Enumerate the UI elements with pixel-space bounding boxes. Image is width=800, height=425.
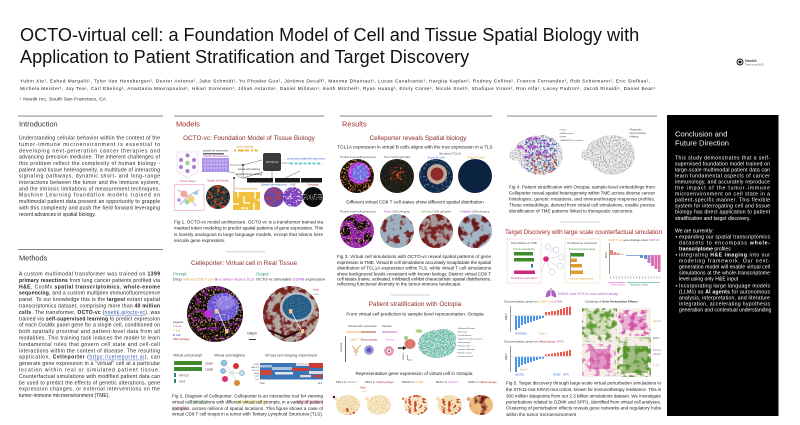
row 2 labels: Protein immunofluorescence — [340, 210, 376, 214]
bar chart: SPP1: NDUFB2 — [515, 374, 525, 376]
bar chart: GZMK: Gene X — [539, 334, 547, 336]
logo and QR note — [737, 59, 764, 66]
gene masking: neighborhood masking — [236, 172, 263, 176]
text block: methods — [19, 272, 160, 399]
octopia annotated scatter: • KRAS/STK11 co-mutant — [559, 139, 583, 142]
text block: methods: modalities. This training task induces the model to learn — [19, 336, 160, 342]
text block: current work bullets: datasets to encompass whole- — [679, 240, 770, 246]
text block: introduction: patient and tissue heterogeneity, a multitude of interacting — [19, 167, 160, 173]
scale bar — [247, 332, 257, 340]
author list: Michela Meister¹, Joy Tea¹, Carl Ebeling¹, Anastasia Mavropoulos¹, Hikari Sorensen¹, Jillian Astarita¹, Daniel Millman¹, Keith Mitchell¹, Ryan Huang¹, Emily Corse¹, Nicole Snell¹, Shafique Virani¹, Ron Alfa¹, Lacey Padron¹, Jacob Rinaldi¹, Daniel Bear¹ — [20, 86, 655, 92]
row 1 labels: Virtual B Cells — [427, 156, 445, 160]
text block: conclusion summary: patient-specific manner. This flexible — [675, 198, 770, 204]
gene changes waterfall: vCD8 T cell gene changes when SIRT1/4 — [608, 238, 660, 242]
gene masking — [233, 144, 263, 179]
panel: methods — [18, 249, 163, 399]
figure 4 caption: Fig 4. Patient stratification with Octopia: sample-level embeddings from — [509, 184, 655, 190]
text block: introduction: recent advances in spatial biology. — [19, 212, 96, 218]
logo and QR note: Noetik — [745, 59, 757, 63]
perturbation heatmap: T cell — [653, 364, 659, 367]
author list: Yubin Xie¹, Eshed Margalit¹, Tyler Van Hensbergen¹, Dexter Antonio¹, Jake Schmidt¹, Yu Phoebe Guo¹, Jérémie Decalf¹, Maxime Dhainaut¹, Lucas Cavalcante¹, Hargita Kaplan¹, Rodney Collins¹, Francis Fernandez¹, Rob Schiemann¹, Eric Siefkas¹, — [20, 79, 650, 85]
heading: methods: Methods — [19, 254, 48, 262]
trooping heatmap: TOX — [255, 379, 260, 381]
octopia scatter — [402, 329, 456, 360]
prompt and output labels: Prompt — [173, 272, 187, 276]
gene labels: SPP1 in vMacrophage — [468, 380, 497, 384]
bar chart: SPP1: SPDEF — [553, 374, 561, 376]
modality images: Genotype — [307, 182, 319, 186]
bar chart: SPP1 — [504, 340, 571, 376]
neighbor network — [220, 360, 245, 386]
text block: current work bullets: • — [676, 252, 678, 258]
prompt and output labels: OCTO-vc simulated GZMB expression — [256, 276, 325, 282]
octopia schematic: Tumor — [386, 338, 394, 342]
response scatter: • Responder — [629, 128, 642, 132]
figure 4 caption: Celleporter reveal spatial heterogeneity within TME across diverse cancer — [509, 191, 655, 196]
text block: introduction: tumor-immune microenvironment is essential to — [19, 142, 160, 148]
text block: methods: interactions within the context of disease. The resulting — [19, 348, 160, 354]
octopia schematic: CD8 T — [350, 338, 358, 342]
text block: methods: fundamental rules that govern cell state and cell-cell — [19, 342, 160, 348]
modality images: H&E — [290, 182, 296, 186]
figure 1 caption: is loosely analogous to large language models, except that tokens here — [174, 232, 323, 237]
prompt and output labels: Drop virtual CD8 T cell in a tumor near a TLS — [173, 276, 254, 282]
figure title: patient stratification: Patient stratification with Octopia — [369, 301, 462, 308]
gene changes waterfall: Effect — [605, 252, 608, 258]
octopia schematic: Macrophage — [361, 338, 378, 342]
logo and QR note: Thank us at AACR — [745, 64, 764, 66]
panel: conclusion — [667, 115, 778, 416]
title: OCTO-virtual cell: a Foundation Model of Cell and Tissue Spatial Biology with — [20, 25, 639, 45]
octopia cluster legend: • Inflammatory — [457, 341, 471, 344]
prompt bars: KRT19 — [179, 374, 189, 378]
figure 1 caption: Fig 1. OCTO-vc model architecture. OCTO-vc is a transformer trained via — [174, 220, 323, 224]
figure 3 caption: expression in TME. Virtual B cell simulations accurately recapitulate the spatial — [337, 260, 491, 265]
figure 5 caption: 300 million datapoints from our 2.3 billion simulations dataset. We investigate — [506, 394, 661, 398]
figure 3 caption: Fig 3. Virtual cell simulations with OCTO-vc reveal spatial patterns of gene — [337, 254, 491, 259]
perturbation box: Perturbed expression — [511, 276, 538, 280]
sub-figure heads: Virtual cell prompt — [173, 354, 202, 358]
subtitle representative: Representative gene expression of virtual cell in Octopia — [356, 371, 473, 376]
text block: methods: expression changes, or external interventions on the — [19, 387, 160, 393]
text block: conclusion summary: This study demonstrates that a self- — [675, 156, 770, 162]
trooping heatmap: End — [318, 382, 323, 385]
row 1 labels: True TCL1A (all cells) — [384, 155, 410, 159]
author list — [20, 79, 655, 102]
sub-figure heads: Virtual cell trooping experiment — [265, 354, 317, 358]
text block: current work bullets — [676, 234, 771, 314]
perturbation heatmap — [582, 300, 662, 377]
text block: methods: location within real or simulated patient tissue. — [19, 368, 160, 374]
row 1 labels: Virtual T Cells — [467, 156, 485, 160]
sub-figure heads: Virtual cell neighbor — [214, 354, 246, 358]
perturbation heatmap: effector — [653, 353, 661, 356]
figure 4 caption: identification of TME patterns linked to therapeutic outcomes. — [509, 209, 633, 214]
octopia cluster legend: • Tumor-enriched — [457, 355, 474, 358]
row 2 labels: Naïve CD8 cell gene — [384, 210, 410, 214]
bar chart: SPP1: Effect — [504, 353, 508, 360]
perturbation box — [507, 239, 541, 283]
text block: current work bullets: expanding our spatial transcriptomics — [679, 234, 770, 240]
prompt and output labels: Output — [256, 272, 269, 276]
scale bar: 100μm — [247, 332, 257, 336]
prompt bars: CD4 — [179, 380, 185, 384]
row 2 images — [340, 214, 492, 248]
row 2 labels: Activated CD8 cell gene — [421, 210, 451, 214]
legend: B cell — [173, 333, 181, 337]
heading: conclusion: Conclusion and — [675, 130, 727, 138]
title: Application to Patient Stratification and Target Discovery — [20, 47, 470, 67]
text block: introduction: and the intrinsic limitations of measurement techniques. — [19, 186, 160, 192]
octopia schematic — [339, 324, 406, 362]
bar chart: SPP1: Gene Y — [520, 370, 528, 372]
legend: Tumor — [173, 324, 182, 328]
text block: conclusion summary: We are currently: — [675, 228, 714, 234]
expression key: Low — [313, 292, 320, 296]
spatial cell identity: Spatial cell identity — [207, 178, 229, 182]
network map — [174, 184, 204, 210]
text block: conclusion summary: microenvironment on cell state in a — [675, 192, 770, 198]
figure 2 caption: virtual cell simulations with different virtual cell prompts, in a variety of patient — [172, 400, 324, 405]
row 2 labels: Inhibited CD8 cell gene — [461, 210, 490, 214]
tissue image: output — [263, 286, 319, 342]
cohort label: KRAS-mut STK11-mut cohort study — [558, 292, 618, 296]
text block: methods: cells. The transformer, OCTO-vc (noetik.ai/octo-vc), was — [19, 310, 160, 316]
octopia cluster legend: • Plasma cells — [457, 346, 470, 348]
legend: Macrophage — [173, 337, 190, 341]
heading: conclusion — [675, 130, 729, 148]
gene UMAPs — [333, 395, 494, 416]
figure 3 caption: reflecting functional diversity in the tumor-immune landscape. — [337, 282, 462, 287]
perturbation box: Fixed expression — [513, 247, 535, 251]
text block: conclusion summary: the impact of the tumor-immune — [675, 186, 770, 192]
modality images — [261, 182, 323, 207]
trooping heatmap: TCF7 — [254, 376, 260, 378]
panel: models — [172, 116, 326, 417]
figure 1 caption: encode gene expression. — [174, 238, 225, 243]
gene labels — [336, 380, 497, 384]
text block: current work bullets: generation and contextual understanding — [679, 308, 771, 314]
prompt bars — [174, 361, 213, 384]
subtitle TCL1A: TCL1A expression in virtual B cells aligns with the true expression in a TLS — [337, 144, 493, 150]
trooping heatmap: GZMB — [253, 364, 260, 366]
text block: methods: transcriptomics dataset, comprising more than 40 million — [19, 304, 160, 310]
figure 5 caption: within the tumor microenvironment — [506, 412, 577, 417]
figure 1 caption: masked token modeling to predict spatial patterns of gene expression. This — [174, 226, 324, 231]
perturbation heatmap: Clustering of Gene Perturbation Effects — [585, 300, 638, 304]
panel: results, right column — [504, 116, 662, 417]
figure 5 caption — [506, 380, 662, 417]
figure title: OCTO-vc: OCTO-vc: Foundation Model of Tissue Biology — [183, 135, 316, 142]
output bars — [247, 178, 322, 182]
panel: results, left column: Low — [362, 389, 368, 393]
text block: current work bullets: Incorporating large language models — [679, 284, 770, 290]
legend: Legend — [173, 320, 183, 324]
modality images: Spatial transcriptomics — [261, 182, 288, 186]
figure title: Celleporter reveals: Celleporter reveals Spatial biology — [370, 135, 467, 142]
perturbation network — [541, 244, 564, 275]
gene labels: MHC I in vTumor — [436, 380, 458, 384]
figure 5 caption: perturbations related to GZMK and SPP1, identified from virtual cell analyses. — [506, 400, 661, 404]
prediction box: Model output gene — [570, 276, 594, 280]
gene changes waterfall: Activation states — [630, 284, 649, 286]
subtitle CD8: Different virtual CD8 T cell states show different spatial distribution — [346, 200, 484, 204]
trooping heatmap: PDCD1 — [252, 370, 260, 372]
figure 3 caption: distribution of TCL1A expression within TLS, while virtual T cell simulations — [337, 265, 492, 270]
text block: introduction: Machine Learning foundation models trained on — [19, 193, 160, 199]
row 1 labels: Protein immunofluorescence — [340, 155, 376, 159]
figure 3 caption: show background levels consistent with known biology. Distinct virtual CD8 T — [337, 271, 491, 276]
tissue image: prompt — [187, 286, 243, 342]
prompt bars: CD8B — [205, 368, 213, 372]
gene labels: PDCD1 in vCD8 — [402, 380, 423, 384]
trooping heatmap: LAG3 — [254, 372, 260, 375]
text block: current work bullets: integrating H&E imaging into our — [679, 252, 770, 258]
octopia schematic: Sample — [382, 324, 392, 328]
trooping heatmap — [251, 363, 323, 385]
row 2 labels — [340, 210, 490, 214]
tumor tissue shield: Tumor tissue — [179, 179, 196, 183]
neighborhood blocks — [233, 186, 260, 210]
octopia cluster legend: • Squamous/Cell carcinoma — [457, 338, 483, 340]
spatial expression grid: Spatial cell expression — [203, 154, 229, 158]
octopia scatter: UMAP 2 — [402, 352, 405, 360]
figure 2 caption: Fig 2. Diagram of Celleporter. Celleporter is an interactive tool for viewing — [172, 394, 323, 398]
bar chart: GZMK — [504, 300, 571, 336]
prediction box — [565, 239, 600, 283]
neighborhood blocks: Cell neighborhoods — [235, 186, 258, 190]
text block: conclusion summary: system for interrogating cell and tissue — [675, 204, 770, 210]
octopia cluster legend: • Malignant/Stromal — [457, 327, 476, 330]
trooping heatmap: HAVCR2 — [251, 366, 260, 369]
row 1 labels — [340, 152, 485, 160]
figure 4 caption — [509, 184, 655, 214]
text block: methods: H&E, CosMx spatial transcriptomics, whole-exome — [19, 284, 160, 290]
text block: current work bullets: generation model will enable virtual cell — [679, 264, 770, 270]
text block: conclusion summary: biology has direct application to patient — [675, 210, 771, 216]
text block: methods: both spatially proximal and patient-level data from all — [19, 329, 160, 335]
text block: introduction: advancing precision medicine. The inherent challenges of — [19, 155, 161, 161]
text block: introduction: developing next-generation cancer therapies and — [19, 148, 160, 154]
octopia cluster legend — [457, 327, 483, 358]
heading: results: Results — [342, 120, 367, 128]
octopia annotated scatter — [510, 129, 582, 175]
author list: ¹ Noetik Inc, South San Francisco, CA — [20, 96, 107, 102]
title — [20, 25, 639, 67]
panel: results, left column — [333, 116, 497, 416]
expression key: High — [313, 288, 319, 292]
figure 1: model architecture — [174, 144, 326, 210]
text block: conclusion summary: immunology, and accurately reproduce — [675, 180, 770, 186]
prompt and output labels — [173, 272, 325, 282]
text block: conclusion summary — [675, 156, 771, 234]
gene labels: PDL1 in vTumor — [336, 380, 357, 384]
figure 2 caption — [172, 394, 324, 417]
legend — [173, 320, 190, 341]
spatial expression grid — [202, 148, 229, 172]
text block: current work bullets: transcriptome profiles — [679, 246, 731, 252]
figure 3 caption: cell states (naive, activated, inhibited) exhibit characteristic spatial distributions, — [337, 277, 491, 282]
response scatter: • Missing — [629, 136, 639, 138]
text block: conclusion summary: supervised foundation model trained on — [675, 162, 770, 168]
perturbation heatmap: MHC I — [653, 337, 660, 340]
figure title: Celleporter: Celleporter: Virtual cell in Real Tissue — [191, 260, 297, 267]
text block: methods: panel. To our knowledge this is the largest extant spatial — [19, 297, 160, 303]
predicted expression — [287, 156, 326, 164]
text block: introduction: this problem reflect the complexity of human biology - — [19, 161, 160, 167]
text block: methods: generate gene expression in a "virtual" cell at a particular — [19, 361, 160, 367]
gene masking: gene masking — [237, 144, 254, 148]
text block: introduction: Understanding cellular behavior within the context of the — [19, 136, 160, 142]
octopia annotated scatter: • KRAS mutant — [559, 132, 573, 135]
figure 4 caption: histologies, genetic mutations, and immunotherapy response profiles. — [509, 197, 655, 202]
response scatter: • Non-responder — [629, 132, 646, 135]
OCTO-vc block: OCTO-vc — [266, 160, 279, 164]
text block: current work bullets: integration, accelerating hypothesis — [679, 302, 770, 308]
row 1 labels: Simulated TCL1A — [439, 152, 461, 156]
legend: T cell — [173, 328, 180, 332]
spatial cell identity — [206, 180, 230, 209]
text block: current work bullets: analysis, interpretation, and literature — [679, 296, 770, 302]
text block: introduction: signaling pathways, dynamic short- and long-range — [19, 174, 160, 180]
bar chart: GZMK: Effect — [504, 313, 508, 320]
gene changes waterfall — [605, 238, 660, 286]
text block: current work bullets: simulations at the whole-transcriptome — [679, 270, 770, 276]
octopia cluster legend: • Fibrotic stroma — [457, 352, 473, 354]
prompt bars: CD8A — [205, 362, 213, 366]
text block: current work bullets: level using only H&E input — [679, 276, 739, 282]
text block: conclusion summary: large-scale multimodal patient data can — [675, 168, 770, 174]
text block: current work bullets: • — [676, 234, 678, 240]
text block: methods: application, Celleporter (https://celleporter.ai), can — [19, 355, 160, 361]
octopia schematic: Virtual cells' expression — [348, 324, 378, 328]
text block: introduction: interactions between the tumor and the immune system, — [19, 180, 160, 186]
tumor tissue shield — [177, 152, 198, 183]
text block: introduction: multimodal patient data present an opportunity to grapple — [19, 199, 160, 205]
text block: methods: tumor-immune microenvironment (TME). — [19, 393, 110, 399]
octopia cluster legend: • Lepidic/Acinar — [457, 334, 472, 337]
subtitle Octopia: From virtual cell prediction to sample level representation: Octopia — [346, 312, 484, 316]
text block: current work bullets: modeling framework. Our next- — [679, 258, 770, 264]
perturbation heatmap: Immune — [653, 349, 662, 352]
panel: introduction — [18, 116, 163, 218]
heading: introduction: Introduction — [19, 120, 58, 128]
bar chart: SPP1: Top perturbation genes on vMacrophage SPP1 — [504, 340, 565, 344]
text block: current work bullets: (LLMs) as AI agents for autonomous — [679, 290, 770, 296]
expression key — [313, 288, 320, 296]
perturbation box: Perturbation on TME — [511, 241, 537, 245]
text block: methods: Counterfactual simulations with modified patient data can — [19, 374, 160, 380]
text block: methods: sequencing, and a custom multiplex immunofluorescence — [19, 291, 160, 297]
octopia cluster legend: • Mucinous — [457, 332, 467, 334]
prediction box: Predicted on virtual cell — [568, 241, 597, 245]
text block: introduction — [19, 136, 161, 218]
gene masking: spatial cell masking — [238, 167, 261, 171]
row 1 images — [340, 159, 492, 193]
bar chart: SPP1: SIRT1 — [563, 374, 570, 376]
figure 5 caption: Fig 5. Target discovery through large-scale virtual perturbation simulations in — [506, 380, 661, 386]
figure 5 caption: Clustering of perturbation effects reveals gene networks and regulatory hubs — [506, 406, 662, 411]
perturbation heatmap: Gene X — [653, 320, 662, 323]
gene changes waterfall: Naive states — [611, 284, 626, 286]
text block: methods: A custom multimodal transformer was trained on 1399 — [19, 272, 160, 278]
text block: conclusion summary: stratification and target discovery. — [675, 216, 750, 222]
bar chart: GZMK: SERPINB9 — [515, 334, 527, 336]
octopia schematic: Sample — [339, 342, 343, 352]
response scatter — [582, 128, 646, 175]
text block: current work bullets: • — [676, 284, 678, 290]
octopia cluster legend: • Immune infiltrated — [457, 348, 476, 351]
sub-figure heads — [173, 354, 317, 358]
figure 2 caption: virtual CD8 T cell troops in a tumor with Tertiary Lymphoid Structures (TLS). — [172, 412, 323, 417]
figure 5 caption: the STK11-mut KRAS-mut cohort, known for immunotherapy resistance. This is — [506, 387, 662, 392]
figure 1 caption — [174, 220, 324, 243]
bar chart: GZMK: Top perturbation genes on vCD8 T cell GZMK — [504, 300, 562, 304]
spatial expression grid: spatial cell expression — [203, 148, 229, 152]
figure 2 caption: samples, across millions of spatial locations. This figure shows a case of — [172, 406, 324, 411]
icon: lungs — [546, 288, 556, 297]
figure 4 caption: These embeddings, derived from virtual cell simulations, enable precise — [509, 203, 655, 208]
prediction box: Fixed prompted gene — [569, 247, 596, 251]
text block: conclusion summary: learn fundamental aspects of cancer — [675, 174, 770, 180]
predicted expression: processed spatial cell expression — [287, 156, 326, 160]
figure 3 caption — [337, 254, 492, 287]
text block: methods: trained via self-supervised learning to predict expression — [19, 316, 160, 322]
octopia annotated scatter: • Others — [559, 128, 567, 132]
text block: introduction: with this complexity and push the field forward leveraging — [19, 205, 160, 211]
panel: results, left column: High — [360, 386, 366, 390]
text block: methods: primary resections from lung cancer patients profiled via — [19, 278, 160, 284]
octopia annotated scatter: • EGFR — [559, 136, 567, 138]
gene labels: PDL1 in vMacrophage — [365, 380, 394, 384]
figure title: target discovery: Target Discovery with large scale counterfactual simulation — [505, 229, 662, 236]
OCTO-vc block — [263, 153, 281, 171]
heading: conclusion: Future Direction — [675, 138, 729, 148]
text block: methods: of each CosMx panel gene for a single cell, conditioned on — [19, 323, 160, 329]
trooping heatmap: Start — [260, 382, 265, 385]
text block: methods: be used to predict the effects of genetic alterations, gene — [19, 380, 160, 386]
heading: models: Models — [176, 120, 200, 128]
